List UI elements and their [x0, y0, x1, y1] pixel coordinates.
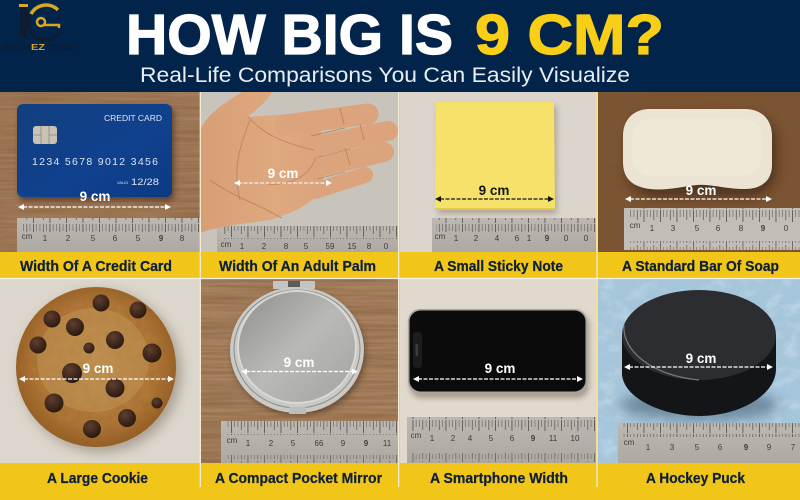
- icon: cookie: [16, 287, 176, 447]
- ruler: 5: [695, 443, 700, 452]
- logo: EZ: [31, 43, 45, 52]
- ruler: 1: [527, 234, 532, 243]
- ruler: 1: [454, 234, 459, 243]
- ruler: 0: [564, 234, 569, 243]
- ruler: 66: [315, 439, 324, 448]
- caption: soap: A Standard Bar Of Soap: [622, 258, 779, 275]
- ruler: 2: [474, 234, 479, 243]
- panel: credit card: [0, 92, 200, 254]
- measurement: 9 cm: 9 cm: [80, 189, 110, 204]
- measurement: 9 cm: [435, 186, 554, 202]
- icon: hand: [201, 90, 388, 232]
- ruler: 8: [367, 242, 372, 251]
- ruler: 5: [695, 224, 700, 233]
- ruler: [217, 226, 400, 254]
- ruler: 1: [240, 242, 245, 251]
- ruler: 4: [468, 434, 473, 443]
- measurement: 9 cm: 9 cm: [284, 355, 314, 370]
- ruler: 6: [716, 224, 721, 233]
- icon: credit card: [17, 104, 172, 197]
- ruler: 9: [159, 234, 164, 243]
- measurement: 9 cm: 9 cm: [83, 361, 113, 376]
- measurement: 9 cm: [18, 192, 171, 210]
- ruler: 2: [262, 242, 267, 251]
- caption: sticky note: A Small Sticky Note: [434, 258, 563, 275]
- ruler: 1: [430, 434, 435, 443]
- ruler: [624, 208, 800, 250]
- measurement: 9 cm: [234, 168, 332, 186]
- ruler: [618, 423, 800, 465]
- ruler: 2: [66, 234, 71, 243]
- ruler: 8: [180, 234, 185, 243]
- caption: mirror: A Compact Pocket Mirror: [215, 470, 382, 487]
- ruler: [17, 218, 200, 254]
- measurement: 9 cm: [625, 186, 772, 202]
- measurement: 9 cm: 9 cm: [485, 361, 515, 376]
- caption: smartphone: A Smartphone Width: [430, 470, 568, 487]
- measurement: 9 cm: 9 cm: [686, 183, 716, 198]
- panel: smartphone: [400, 279, 596, 463]
- logo: INCH: [2, 43, 31, 52]
- ruler: 8: [739, 224, 744, 233]
- ruler: 3: [671, 224, 676, 233]
- icon: soap: [623, 109, 772, 190]
- ruler: 3: [670, 443, 675, 452]
- icon: credit card: 12/28: [131, 177, 159, 188]
- ruler: 59: [326, 242, 335, 251]
- ruler: 9: [341, 439, 346, 448]
- panel: cookie: [0, 279, 200, 463]
- ruler: cm: [227, 436, 238, 445]
- panel: hockey puck: [598, 279, 800, 465]
- ruler: 9: [744, 443, 749, 452]
- icon: hockey puck: [622, 290, 776, 416]
- ruler: 1: [646, 443, 651, 452]
- ruler: 5: [489, 434, 494, 443]
- ruler: cm: [630, 221, 641, 230]
- ruler: 6: [515, 234, 520, 243]
- ruler: 9: [767, 443, 772, 452]
- ruler: 5: [291, 439, 296, 448]
- ruler: 5: [136, 234, 141, 243]
- logo: [2, 4, 77, 52]
- measurement: 9 cm: [413, 364, 583, 382]
- caption: hockey puck: A Hockey Puck: [646, 470, 746, 487]
- measurement: 9 cm: 9 cm: [686, 351, 716, 366]
- ruler: 1: [43, 234, 48, 243]
- ruler: 9: [531, 434, 536, 443]
- icon: sticky note: [435, 102, 555, 210]
- icon: credit card: 1234 5678 9012 3456: [32, 156, 158, 168]
- ruler: 10: [571, 434, 580, 443]
- ruler: 2: [269, 439, 274, 448]
- measurement: 9 cm: [19, 364, 174, 382]
- ruler: 8: [284, 242, 289, 251]
- subtitle: Real-Life Comparisons You Can Easily Visualize: [140, 64, 630, 87]
- ruler: 6: [113, 234, 118, 243]
- ruler: cm: [435, 232, 446, 241]
- ruler: cm: [624, 438, 635, 447]
- measurement: 9 cm: 9 cm: [479, 183, 509, 198]
- ruler: 6: [718, 443, 723, 452]
- ruler: 9: [364, 439, 369, 448]
- ruler: cm: [22, 232, 33, 241]
- ruler: 11: [549, 434, 558, 443]
- ruler: 9: [761, 224, 766, 233]
- ruler: 2: [451, 434, 456, 443]
- panel: sticky note: [400, 92, 596, 254]
- panel: adult palm: [201, 90, 400, 254]
- icon: smartphone: [408, 309, 587, 394]
- panel: pocket mirror: [201, 279, 398, 465]
- ruler: 9: [545, 234, 550, 243]
- ruler: 15: [348, 242, 357, 251]
- title: 9 CM?: [475, 3, 664, 67]
- panel: bar of soap: [598, 92, 800, 252]
- measurement: 9 cm: 9 cm: [268, 166, 298, 181]
- ruler: [407, 417, 596, 463]
- ruler: [432, 218, 596, 254]
- header banner: [0, 0, 800, 92]
- ruler: 5: [91, 234, 96, 243]
- ruler: 7: [791, 443, 796, 452]
- icon: credit card: VALID: [117, 180, 128, 185]
- ruler: 0: [584, 234, 589, 243]
- ruler: 1: [650, 224, 655, 233]
- ruler: 0: [784, 224, 789, 233]
- ruler: 5: [304, 242, 309, 251]
- ruler: [221, 421, 398, 465]
- ruler: cm: [221, 240, 232, 249]
- measurement: 9 cm: [241, 358, 358, 374]
- icon: compact mirror: [230, 281, 364, 414]
- ruler: 4: [495, 234, 500, 243]
- ruler: 0: [384, 242, 389, 251]
- caption: credit card: Width Of A Credit Card: [20, 258, 172, 275]
- title: HOW BIG IS: [126, 3, 453, 67]
- caption: palm: Width Of An Adult Palm: [219, 258, 376, 275]
- logo: GUIDE: [47, 43, 77, 52]
- caption: cookie: A Large Cookie: [47, 470, 148, 487]
- measurement: 9 cm: [624, 354, 773, 370]
- ruler: 11: [383, 439, 392, 448]
- ruler: 1: [246, 439, 251, 448]
- ruler: cm: [411, 431, 422, 440]
- ruler: 6: [510, 434, 515, 443]
- icon: credit card: CREDIT CARD: [104, 113, 162, 123]
